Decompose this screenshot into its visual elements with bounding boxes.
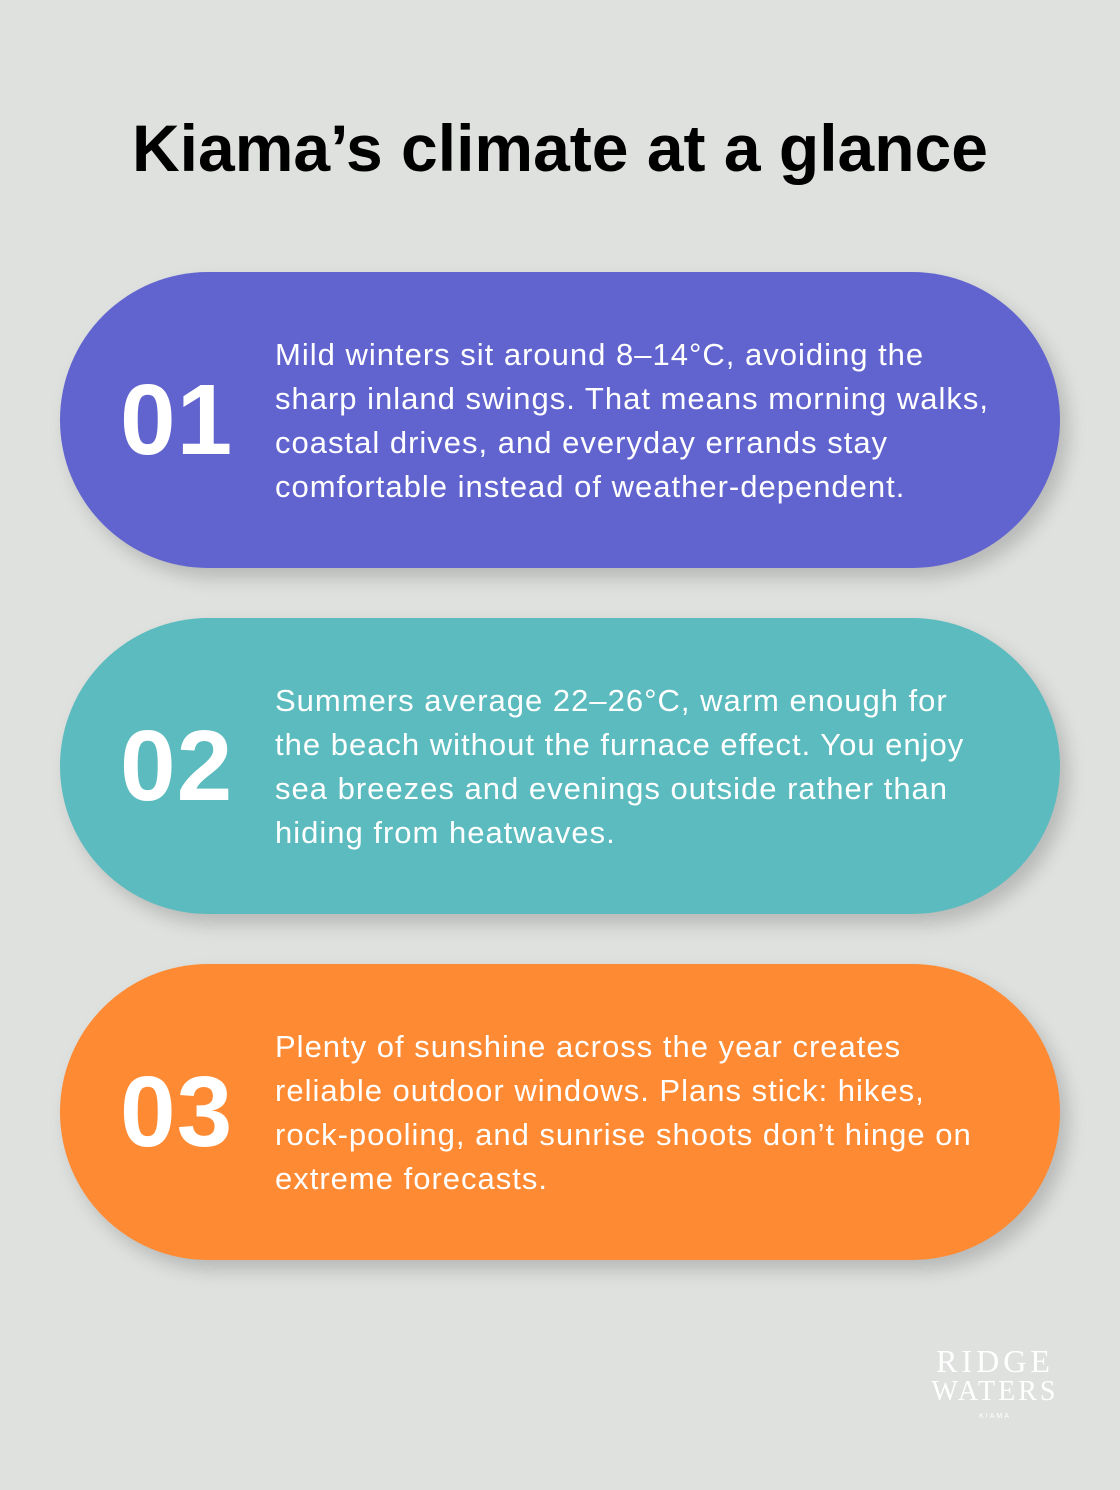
text 03: [275, 1029, 972, 1196]
logo: KIAMA: [979, 1413, 1011, 1420]
text 02: hiding from heatwaves.: [275, 815, 616, 850]
text 01: Mild winters sit around 8–14°C, avoiding the: [275, 337, 924, 372]
text 02: the beach without the furnace effect. You enjoy: [275, 727, 964, 762]
panel: 01 winters: [60, 272, 1060, 568]
logo: WATERS: [932, 1376, 1058, 1407]
text 02: Summers average 22–26°C, warm enough for: [275, 683, 948, 718]
logo: RIDGE: [936, 1343, 1054, 1379]
panel: 02 summers: [60, 618, 1060, 914]
text 01: comfortable instead of weather-dependent.: [275, 469, 905, 504]
text 03: Plenty of sunshine across the year creates: [275, 1029, 901, 1064]
number 03: 03: [120, 1056, 233, 1168]
title: Kiama’s climate at a glance: [132, 111, 988, 185]
text 02: [275, 683, 964, 850]
logo: [932, 1343, 1058, 1420]
number 01: 01: [120, 364, 233, 476]
panel: 03 sunshine: [60, 964, 1060, 1260]
text 03: reliable outdoor windows. Plans stick: hikes,: [275, 1073, 925, 1108]
text 01: coastal drives, and everyday errands stay: [275, 425, 888, 460]
text 01: [275, 337, 989, 504]
text 02: sea breezes and evenings outside rather than: [275, 771, 948, 806]
text 03: rock-pooling, and sunrise shoots don’t hinge on: [275, 1117, 972, 1152]
text 03: extreme forecasts.: [275, 1161, 548, 1196]
number 02: 02: [120, 710, 233, 822]
text 01: sharp inland swings. That means morning walks,: [275, 381, 989, 416]
